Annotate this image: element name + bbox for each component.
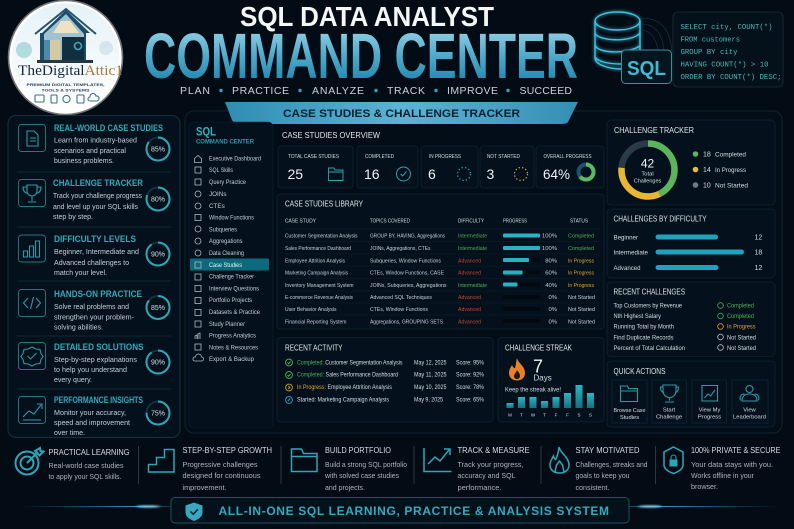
library heading: CASE STUDIES LIBRARY — [285, 200, 364, 208]
table rows: JOINs, Aggregations, CTEs — [370, 246, 431, 252]
tracker legend: In Progress — [715, 167, 746, 174]
feature: real-world case studies: business problems. — [54, 156, 114, 165]
table rows: Inventory Management System — [285, 283, 354, 289]
activity rows: Score: 95% — [456, 360, 485, 366]
logo house — [16, 9, 113, 63]
table rows — [285, 234, 600, 326]
feature: difficulty levels: 90% — [151, 252, 165, 258]
table rows: Aggregations, GROUPING SETS — [370, 320, 443, 326]
recent challenges heading: RECENT CHALLENGES — [614, 288, 685, 296]
footer: practical learning: PRACTICAL LEARNING — [48, 447, 130, 457]
table rows: 40% — [545, 283, 558, 289]
feature: performance insights: over time. — [54, 428, 85, 437]
difficulty labels: 12 — [754, 234, 762, 242]
footer: stay motivated — [550, 445, 648, 492]
difficulty labels: Advanced — [614, 265, 641, 272]
panel: outer dashboard frame — [185, 111, 782, 433]
panel: sidebar navigation: Interview Questions — [209, 286, 259, 292]
panel: challenge tracker — [607, 120, 775, 205]
activity rows: In Progress: Employee Attrition Analysis — [297, 385, 392, 391]
panel: sidebar navigation: SQL Skills — [209, 167, 233, 174]
table rows: CTEs, Window Functions, CASE — [370, 270, 444, 276]
recent challenge rows — [614, 302, 756, 352]
table rows: 100% — [542, 246, 558, 252]
panel: case studies overview — [278, 131, 604, 188]
card: overall progress: OVERALL PROGRESS — [544, 154, 592, 160]
SQL code panel — [673, 12, 783, 87]
SQL code panel: HAVING COUNT(*) > 10 — [680, 62, 768, 70]
footer: step-by-step growth: STEP-BY-STEP GROWTH — [182, 445, 272, 455]
table rows: Not Started — [568, 320, 595, 326]
footer: private and secure: Works offline in your — [691, 471, 754, 480]
donut label — [634, 156, 662, 184]
feature: real-world case studies: scenarios and practical — [54, 146, 126, 155]
card: total case studies: TOTAL CASE STUDIES — [288, 154, 339, 160]
card: not started — [480, 146, 534, 188]
recent challenge rows: Percent of Total Calculation — [614, 345, 685, 352]
difficulty bars — [656, 234, 744, 270]
recent challenge rows: Running Total by Month — [614, 324, 674, 330]
panel: sidebar navigation: Executive Dashboard — [209, 156, 261, 162]
feature: real-world case studies: REAL-WORLD CASE STUDIES — [54, 123, 163, 134]
tracker legend: 18 — [703, 152, 711, 158]
table rows: Not Started — [568, 307, 595, 313]
action: view leaderboard: View — [743, 408, 757, 414]
SQL badge: SQL — [627, 58, 666, 80]
activity rows: May 10, 2025 — [414, 385, 447, 391]
feature: challenge tracker: Track your challenge progress — [53, 191, 142, 200]
logo badge — [8, 0, 123, 114]
card: overall progress: 64% — [543, 166, 570, 182]
title — [144, 1, 578, 92]
feature: difficulty levels: Advanced challenges to — [54, 258, 129, 267]
donut chart — [622, 144, 674, 196]
tagline: TRACK — [387, 85, 425, 97]
panel: sidebar navigation: Progress Analytics — [209, 332, 256, 340]
streak bar chart: S — [589, 412, 592, 418]
streak bar chart: F — [555, 412, 558, 418]
panel: sidebar navigation: Case Studies — [209, 262, 242, 269]
action: view my progress: Progress — [698, 414, 721, 420]
table rows: CTEs, Window Functions — [370, 307, 428, 313]
table rows: E-commerce Revenue Analysis — [285, 295, 353, 301]
bottom banner — [171, 498, 629, 523]
activity heading: RECENT ACTIVITY — [285, 344, 343, 352]
table rows: User Behavior Analysis — [285, 307, 337, 313]
panel: challenge streak — [498, 338, 604, 422]
footer: step-by-step growth: designed for continuous — [182, 471, 261, 480]
streak unit: Days — [534, 374, 552, 382]
donut label: 42 — [641, 156, 654, 170]
table rows: Intermediate — [458, 234, 488, 240]
table rows: Advanced — [458, 258, 481, 264]
action: browse case studies: Studies — [620, 415, 639, 421]
glow line: left — [20, 505, 171, 508]
card: in progress: IN PROGRESS — [429, 154, 461, 160]
panel: sidebar navigation: Study Planner — [209, 321, 245, 328]
footer: private and secure: Your data stays with you. — [691, 460, 773, 469]
activity rows: Started: Marketing Campaign Analysis — [297, 398, 389, 404]
streak bar chart: M — [508, 412, 512, 418]
panel: sidebar navigation: Window Functions — [209, 214, 254, 222]
card: in progress — [421, 146, 478, 188]
panel: sidebar navigation: Datasets & Practice — [209, 309, 260, 316]
panel: sidebar navigation — [189, 122, 273, 428]
footer: track and measure: accuracy and SQL — [458, 471, 516, 480]
feature: real-world case studies: Learn from industry-based — [54, 136, 137, 144]
title line: SQL Data Analyst: SQL DATA ANALYST — [240, 1, 494, 32]
feature: difficulty levels: DIFFICULTY LEVELS — [54, 234, 136, 245]
recent challenge rows: Completed — [727, 302, 754, 310]
tracker legend: 10 — [703, 182, 711, 190]
table header: DIFFICULTY — [458, 218, 484, 224]
panel: features — [8, 116, 180, 438]
section banner: CASE STUDIES & CHALLENGE TRACKER — [283, 108, 520, 120]
streak bar chart: T — [543, 412, 546, 418]
table header: CASE STUDY — [285, 218, 316, 224]
footer: practical learning: to apply your SQL skills. — [48, 472, 122, 481]
sidebar subtitle: COMMAND CENTER — [196, 138, 254, 146]
table rows: Intermediate — [458, 246, 488, 252]
recent challenge rows: Completed — [727, 313, 754, 320]
donut label: Challenges — [634, 178, 662, 184]
table rows: Advanced — [458, 320, 481, 326]
flame core — [514, 370, 520, 379]
table rows: In Progress — [568, 258, 594, 264]
table header: PROGRESS — [503, 218, 527, 224]
recent challenge rows: Not Started — [727, 345, 756, 352]
footer: track and measure: TRACK & MEASURE — [458, 445, 530, 455]
footer: stay motivated: Challenges, streaks and — [576, 460, 648, 469]
activity rows: Score: 65% — [456, 398, 485, 404]
recent challenge rows: Nth Highest Salary — [614, 313, 662, 320]
action: view leaderboard: Leaderboard — [733, 414, 766, 420]
table rows: 80% — [545, 258, 558, 264]
difficulty labels — [614, 234, 762, 272]
feature: challenge tracker: CHALLENGE TRACKER — [53, 178, 143, 189]
footer: build portfolio: with solved case studies — [324, 471, 399, 480]
title line: Command Center: COMMAND CENTER — [144, 20, 578, 92]
panel: challenges by difficulty — [607, 209, 775, 278]
table rows: Intermediate — [458, 283, 488, 289]
SQL code panel: ORDER BY COUNT(*) DESC; — [680, 74, 782, 82]
footer: private and secure: browser. — [691, 482, 718, 491]
panel: sidebar navigation: Data Cleaning — [209, 250, 244, 257]
tagline: ANALYZE — [312, 85, 364, 97]
donut label: Total — [641, 172, 654, 178]
streak bar chart: T — [520, 412, 523, 418]
quick actions heading: QUICK ACTIONS — [614, 367, 666, 376]
footer: build portfolio — [292, 445, 407, 492]
glow line: right — [629, 505, 780, 508]
activity rows — [286, 359, 485, 404]
feature: real-world case studies — [18, 123, 170, 165]
icon: SQL database — [595, 12, 672, 84]
table header: STATUS — [570, 218, 588, 224]
panel: sidebar navigation: Export & Backup — [209, 356, 254, 363]
footer: step-by-step growth: Progressive challenges — [182, 460, 258, 469]
logo tagline: PREMIUM DIGITAL TEMPLATES, — [26, 83, 104, 87]
icon: shield — [186, 502, 202, 521]
table rows: Subqueries, Window Functions — [370, 258, 441, 264]
table rows: Completed — [568, 246, 594, 252]
panel: sidebar navigation: Subqueries — [209, 226, 237, 234]
footer: track and measure: Track your progress, — [458, 460, 524, 469]
SQL code panel: FROM customers — [680, 36, 740, 44]
panel: sidebar navigation: JOINs — [209, 191, 226, 198]
footer: track and measure — [424, 445, 530, 492]
table rows: Customer Segmentation Analysis — [285, 234, 358, 240]
table rows: 0% — [548, 295, 558, 301]
panel: sidebar navigation: Notes & Resources — [209, 344, 258, 352]
footer: stay motivated: consistent. — [576, 483, 610, 492]
streak bar chart: W — [531, 412, 536, 418]
footer: build portfolio: Build a strong SQL portfolio — [325, 460, 407, 469]
card: total case studies: 25 — [288, 166, 303, 182]
banner text: ALL-IN-ONE SQL LEARNING, PRACTICE & ANALYSIS SYSTEM — [218, 504, 609, 518]
feature: difficulty levels: Beginner, Intermediate and — [54, 247, 139, 256]
recent challenge rows: In Progress — [727, 324, 756, 330]
table rows: 0% — [548, 307, 558, 313]
tagline — [180, 85, 572, 97]
tracker legend: 14 — [703, 167, 711, 174]
difficulty labels: 18 — [754, 250, 762, 256]
feature: real-world case studies: 85% — [151, 146, 165, 154]
tagline: SUCCEED — [520, 85, 572, 97]
difficulty heading: CHALLENGES BY DIFFICULTY — [614, 214, 707, 224]
overview heading: CASE STUDIES OVERVIEW — [282, 131, 380, 140]
footer: stay motivated: STAY MOTIVATED — [576, 445, 640, 455]
action: view my progress — [692, 380, 726, 423]
table rows: Advanced — [458, 295, 481, 301]
feature: detailed solutions — [18, 342, 170, 384]
card: completed: 16 — [364, 166, 380, 182]
SQL code panel: SELECT city, COUNT(*) — [680, 24, 772, 32]
active nav highlight — [190, 258, 269, 270]
table rows: 0% — [548, 320, 558, 326]
table header: TOPICS COVERED — [370, 218, 410, 224]
action: start challenge: Challenge — [656, 414, 682, 420]
activity rows: May 11, 2025 — [414, 372, 447, 378]
panel: sidebar navigation: Challenge Tracker — [209, 274, 254, 280]
panel: quick actions — [607, 361, 775, 427]
logo wordmark: TheDigital Attic1 — [18, 63, 123, 79]
feature: performance insights: Monitor your accuracy, — [54, 408, 126, 417]
feature: challenge tracker — [18, 178, 170, 221]
streak count: 7 — [533, 356, 543, 376]
feature: challenge tracker: step by step. — [53, 212, 93, 221]
activity rows: May 9, 2025 — [414, 398, 444, 404]
footer: practical learning: Real-world case studies — [48, 461, 124, 470]
table rows: GROUP BY, HAVING, Aggregations — [370, 234, 445, 240]
tagline: PRACTICE — [232, 85, 289, 97]
panel: sidebar navigation: Portfolio Projects — [209, 297, 252, 304]
feature: hands-on practice: strengthen your problem- — [54, 312, 134, 322]
action: view my progress: View My — [699, 408, 720, 414]
footer: step-by-step growth — [148, 445, 272, 492]
table rows: Advanced — [458, 270, 481, 276]
logo small icons — [35, 93, 99, 103]
table rows: Advanced — [458, 307, 481, 313]
feature: detailed solutions: 90% — [151, 360, 165, 366]
recent challenge rows: Find Duplicate Records — [614, 334, 674, 342]
action: view leaderboard — [732, 380, 768, 423]
activity rows: Completed: Sales Performance Dashboard — [297, 372, 398, 378]
table rows: Advanced SQL Techniques — [370, 295, 432, 301]
difficulty labels: Beginner — [614, 234, 638, 242]
footer: practical learning — [16, 447, 130, 481]
panel: sidebar navigation: CTEs — [209, 203, 225, 210]
footer: track and measure: performance. — [458, 483, 502, 492]
table rows: Employee Attrition Analysis — [285, 258, 345, 264]
footer: build portfolio: and projects. — [325, 483, 365, 492]
feature: performance insights: PERFORMANCE INSIGHTS — [54, 395, 143, 406]
feature: detailed solutions: every query. — [54, 375, 92, 384]
feature: hands-on practice: HANDS-ON PRACTICE — [54, 289, 142, 300]
table rows: Completed — [568, 234, 594, 240]
footer feature strip — [16, 445, 781, 492]
action: start challenge — [652, 380, 686, 423]
tagline: PLAN — [180, 85, 210, 97]
sidebar brand: SQL — [196, 124, 216, 138]
footer: step-by-step growth: improvement. — [182, 483, 226, 492]
table rows: Marketing Campaign Analysis — [285, 270, 348, 276]
table rows: In Progress — [568, 270, 594, 276]
table rows: Financial Reporting System — [285, 320, 347, 326]
tracker heading: CHALLENGE TRACKER — [614, 126, 694, 135]
tracker legend: Completed — [715, 152, 747, 158]
activity rows: Score: 78% — [456, 385, 485, 391]
recent challenge rows: Top Customers by Revenue — [614, 302, 682, 310]
activity rows: May 12, 2025 — [414, 360, 447, 366]
feature: hands-on practice: Solve real problems and — [54, 302, 129, 311]
activity rows: Score: 92% — [456, 372, 485, 378]
table header — [285, 218, 600, 229]
streak bar chart: S — [577, 412, 581, 418]
card: not started: NOT STARTED — [487, 154, 520, 160]
feature: detailed solutions: DETAILED SOLUTIONS — [54, 342, 144, 353]
activity rows: Completed: Customer Segmentation Analysis — [297, 360, 402, 366]
table rows: Not Started — [568, 295, 595, 301]
feature: detailed solutions: Step-by-step explanations — [54, 355, 137, 364]
table rows: Sales Performance Dashboard — [285, 246, 351, 252]
streak bar chart — [506, 385, 594, 418]
feature: challenge tracker: and level up your SQL skills — [53, 202, 138, 211]
action: browse case studies — [612, 380, 647, 423]
panel: recent activity — [277, 338, 493, 422]
table rows: 100% — [542, 234, 558, 240]
card: in progress: 6 — [428, 166, 436, 182]
feature: difficulty levels — [18, 234, 170, 277]
table rows: In Progress — [568, 283, 594, 289]
card: overall progress — [536, 146, 604, 188]
feature: performance insights: speed and improvement — [54, 418, 131, 427]
table rows: 60% — [545, 270, 558, 276]
streak bar chart: F — [566, 412, 569, 418]
action: browse case studies: Browse Case — [614, 408, 646, 414]
tracker legend — [693, 151, 749, 190]
action: start challenge: Start — [663, 408, 676, 414]
tagline: IMPROVE — [447, 85, 498, 97]
feature: difficulty levels: match your level. — [54, 268, 107, 277]
difficulty labels: 12 — [754, 265, 762, 272]
SQL code panel: GROUP BY city — [680, 49, 738, 57]
icon: flame — [509, 358, 525, 380]
card: completed — [357, 146, 418, 188]
panel: case studies library — [277, 194, 604, 329]
feature: hands-on practice — [18, 289, 170, 332]
card: not started: 3 — [486, 166, 494, 182]
feature: performance insights: 75% — [151, 410, 165, 418]
feature: challenge tracker: 80% — [151, 196, 165, 204]
streak heading: CHALLENGE STREAK — [505, 344, 573, 352]
panel: sidebar navigation: Query Practice — [209, 179, 246, 186]
feature: detailed solutions: to help you understand — [54, 365, 127, 374]
panel: recent challenges — [607, 282, 775, 356]
footer: build portfolio: BUILD PORTFOLIO — [325, 445, 391, 455]
footer: private and secure — [664, 445, 781, 491]
feature: hands-on practice: solving abilities. — [54, 322, 103, 332]
card: total case studies — [278, 146, 353, 188]
card: completed: COMPLETED — [365, 154, 394, 160]
logo tagline second line: TOOLS & SYSTEMS — [42, 88, 90, 92]
recent challenge rows: Not Started — [727, 334, 756, 342]
difficulty labels: Intermediate — [614, 250, 648, 256]
tracker legend: Not Started — [715, 182, 749, 190]
table rows: JOINs, Subqueries, Aggregations — [370, 283, 447, 289]
streak message: Keep the streak alive! — [505, 388, 561, 394]
section banner — [225, 102, 578, 124]
panel: sidebar navigation: Aggregations — [209, 238, 242, 245]
feature: performance insights — [18, 395, 170, 437]
footer: stay motivated: goals to keep you — [576, 471, 630, 480]
feature: hands-on practice: 85% — [151, 305, 165, 312]
